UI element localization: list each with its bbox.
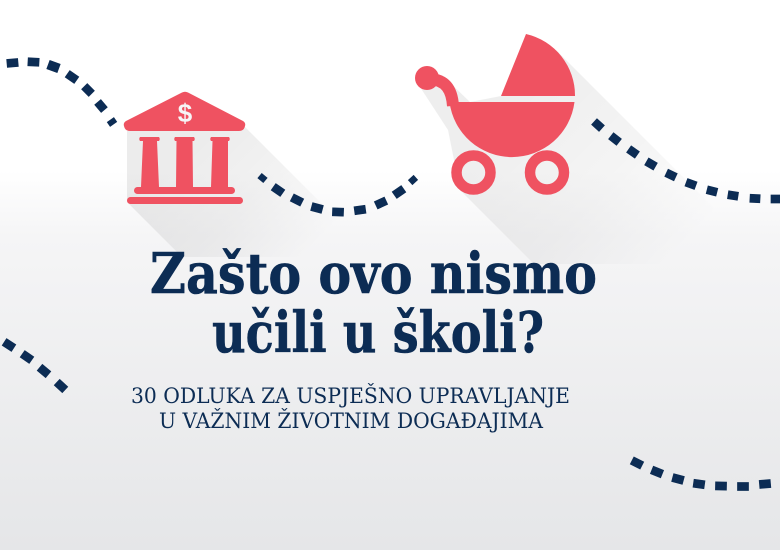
stroller left wheel bbox=[456, 156, 490, 190]
stroller handle grip bbox=[415, 66, 439, 90]
icon: stroller bbox=[415, 34, 575, 190]
stroller right wheel bbox=[530, 156, 564, 190]
dollar sign: $ bbox=[178, 98, 193, 128]
bank base bbox=[134, 187, 235, 194]
subtitle: 30 ODLUKA ZA USPJEŠNO UPRAVLJANJE bbox=[131, 383, 570, 408]
stroller handle bbox=[430, 79, 453, 106]
subtitle bbox=[131, 383, 570, 433]
bank columns bbox=[139, 137, 230, 187]
title bbox=[150, 241, 597, 366]
bank long shadow bbox=[127, 127, 375, 257]
subtitle: U VAŽNIM ŽIVOTNIM DOGAĐAJIMA bbox=[159, 409, 544, 433]
stroller body bbox=[450, 102, 574, 157]
icon: bank bbox=[124, 92, 245, 204]
dashed line: lower right bbox=[630, 457, 771, 490]
stroller long shadow bbox=[420, 50, 770, 264]
dashed line: lower left bbox=[2, 339, 68, 393]
dashed line: top left bbox=[7, 58, 117, 126]
title: Zašto ovo nismo bbox=[150, 241, 597, 307]
bank foot bbox=[127, 197, 243, 204]
bank roof bbox=[124, 92, 245, 131]
title: učili u školi? bbox=[212, 300, 544, 366]
stroller canopy bbox=[501, 34, 575, 96]
dashed line: middle bbox=[258, 173, 418, 216]
dashed line: right bbox=[592, 119, 780, 203]
